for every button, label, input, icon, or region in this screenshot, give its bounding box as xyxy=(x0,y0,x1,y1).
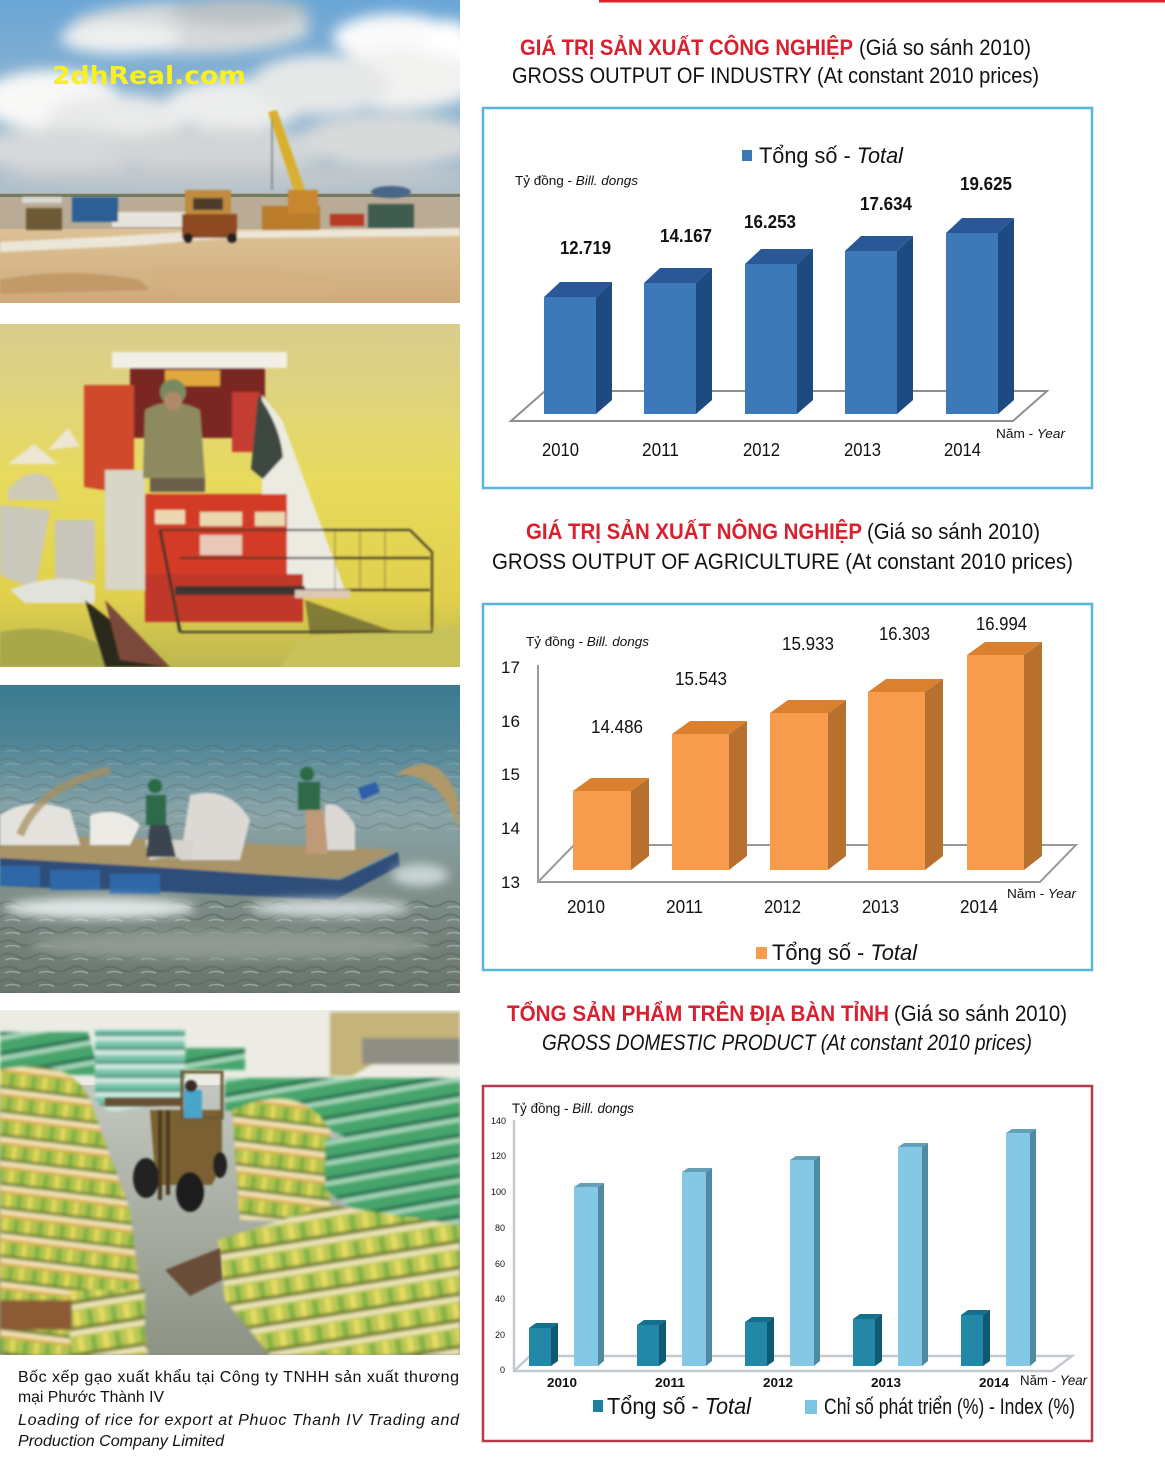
y axis labels: 100 xyxy=(491,1187,506,1197)
year labels: 2014 xyxy=(960,897,998,917)
value labels: 15.933 xyxy=(782,634,834,654)
y axis labels: 120 xyxy=(491,1151,506,1161)
value labels xyxy=(591,614,1027,737)
y axis labels: 14 xyxy=(501,819,520,838)
value labels: 16.253 xyxy=(744,212,796,232)
year labels xyxy=(542,440,981,460)
value labels: 12.719 xyxy=(560,238,611,258)
y axis labels: 15 xyxy=(501,765,520,784)
bars 2010 xyxy=(529,1183,604,1366)
heading: gross domestic product: (Giá so sánh 2010) xyxy=(894,1001,1067,1026)
photo: rice harvester in a yellow field xyxy=(0,324,460,667)
y axis labels: 140 xyxy=(491,1116,506,1126)
legend: total: Tổng số - Total xyxy=(607,1393,752,1419)
bars 2013 xyxy=(853,1143,928,1366)
bar 2013 xyxy=(845,236,913,414)
bar 2011 xyxy=(672,721,747,870)
y axis labels: 40 xyxy=(495,1294,505,1304)
photo: construction site under cloudy sky xyxy=(0,0,480,303)
heading: industry: (Giá so sánh 2010) xyxy=(859,35,1031,60)
legend: index: Chỉ số phát triển (%) - Index (%) xyxy=(824,1394,1075,1419)
y axis labels: 17 xyxy=(501,658,520,677)
heading: agriculture: GROSS OUTPUT OF AGRICULTURE (At constant 2010 prices) xyxy=(492,549,1073,574)
caption: Bốc xếp gạo xuất khẩu tại Công ty TNHH sản xuất thương xyxy=(18,1368,459,1386)
y axis labels: 80 xyxy=(495,1223,505,1233)
y axis labels: 60 xyxy=(495,1259,505,1269)
axis unit: Tỷ đồng - Bill. dongs xyxy=(526,634,650,649)
caption xyxy=(18,1368,460,1450)
bar 2011 xyxy=(644,268,712,414)
heading: industry: GROSS OUTPUT OF INDUSTRY (At constant 2010 prices) xyxy=(512,63,1039,88)
year labels: 2010 xyxy=(547,1375,577,1390)
y axis labels: 16 xyxy=(501,712,520,731)
bar 2010 xyxy=(544,282,612,414)
heading: agriculture xyxy=(492,519,1073,574)
year labels: 2012 xyxy=(763,1375,793,1390)
bar 2010 xyxy=(573,778,649,870)
bar 2012 xyxy=(745,249,813,414)
panel: gross domestic product bar chart xyxy=(483,1086,1092,1441)
axis unit: Tỷ đồng - Bill. dongs xyxy=(512,1100,634,1116)
year labels: 2011 xyxy=(655,1375,685,1390)
y axis labels xyxy=(501,658,520,892)
axis unit: Tỷ đồng - Bill. dongs xyxy=(515,173,639,188)
y axis and floor xyxy=(514,1120,1072,1371)
year labels: 2010 xyxy=(542,440,579,460)
caption: Production Company Limited xyxy=(18,1433,225,1450)
bar 2014 xyxy=(946,218,1014,414)
heading: industry xyxy=(512,35,1039,88)
photo: rice sacks in a warehouse with forklift xyxy=(0,1010,460,1355)
heading: agriculture: (Giá so sánh 2010) xyxy=(867,519,1040,544)
bar 2013 xyxy=(868,679,943,870)
bar 2012 xyxy=(770,700,846,870)
year labels: 2010 xyxy=(567,897,605,917)
chart floor xyxy=(511,391,1047,421)
bar 2014 xyxy=(967,642,1042,870)
heading: agriculture: GIÁ TRỊ SẢN XUẤT NÔNG NGHIỆP xyxy=(526,519,862,544)
year labels: 2013 xyxy=(862,897,899,917)
year labels xyxy=(567,897,998,917)
watermark: 2dhReal.com xyxy=(52,61,246,90)
bars 2012 xyxy=(745,1156,820,1366)
year labels xyxy=(547,1375,1010,1390)
value labels: 16.994 xyxy=(976,614,1027,634)
panel: agriculture bar chart xyxy=(483,604,1092,970)
value labels: 14.167 xyxy=(660,226,712,246)
year labels: 2013 xyxy=(871,1375,901,1390)
year labels: 2012 xyxy=(743,440,780,460)
year labels: 2014 xyxy=(979,1375,1010,1390)
value labels xyxy=(560,174,1012,258)
year labels: 2011 xyxy=(642,440,679,460)
top red rule xyxy=(599,0,1165,2)
axis label: year: Năm - Year xyxy=(1020,1372,1088,1388)
year labels: 2013 xyxy=(844,440,881,460)
axis label: year: Năm - Year xyxy=(996,426,1066,441)
bars 2014 xyxy=(961,1129,1036,1366)
y axis labels: 20 xyxy=(495,1330,505,1340)
y axis labels: 13 xyxy=(501,873,520,892)
axis label: year: Năm - Year xyxy=(1007,886,1077,901)
heading: industry: GIÁ TRỊ SẢN XUẤT CÔNG NGHIỆP xyxy=(520,35,853,60)
value labels: 17.634 xyxy=(860,194,912,214)
caption: Loading of rice for export at Phuoc Thanh IV Trading and xyxy=(18,1412,460,1429)
heading: gross domestic product xyxy=(507,1001,1067,1055)
caption: mại Phước Thành IV xyxy=(18,1389,164,1406)
y axis labels: 0 xyxy=(500,1365,505,1375)
bars 2011 xyxy=(637,1168,712,1366)
photo: workers on a raft tipping feed into a fish pond xyxy=(0,685,460,993)
y axis labels xyxy=(491,1116,506,1375)
panel: industry bar chart xyxy=(483,108,1092,488)
value labels: 16.303 xyxy=(879,624,930,644)
heading: gross domestic product: TỔNG SẢN PHẨM TRÊN ĐỊA BÀN TỈNH xyxy=(507,1001,889,1026)
value labels: 14.486 xyxy=(591,717,643,737)
value labels: 15.543 xyxy=(675,669,727,689)
legend: total: Tổng số - Total xyxy=(759,143,904,168)
year labels: 2014 xyxy=(944,440,981,460)
legend: total: Tổng số - Total xyxy=(772,940,918,965)
heading: gross domestic product: GROSS DOMESTIC PRODUCT (At constant 2010 prices) xyxy=(542,1030,1032,1055)
y axis and floor xyxy=(538,665,1076,882)
year labels: 2011 xyxy=(666,897,703,917)
value labels: 19.625 xyxy=(960,174,1012,194)
year labels: 2012 xyxy=(764,897,801,917)
